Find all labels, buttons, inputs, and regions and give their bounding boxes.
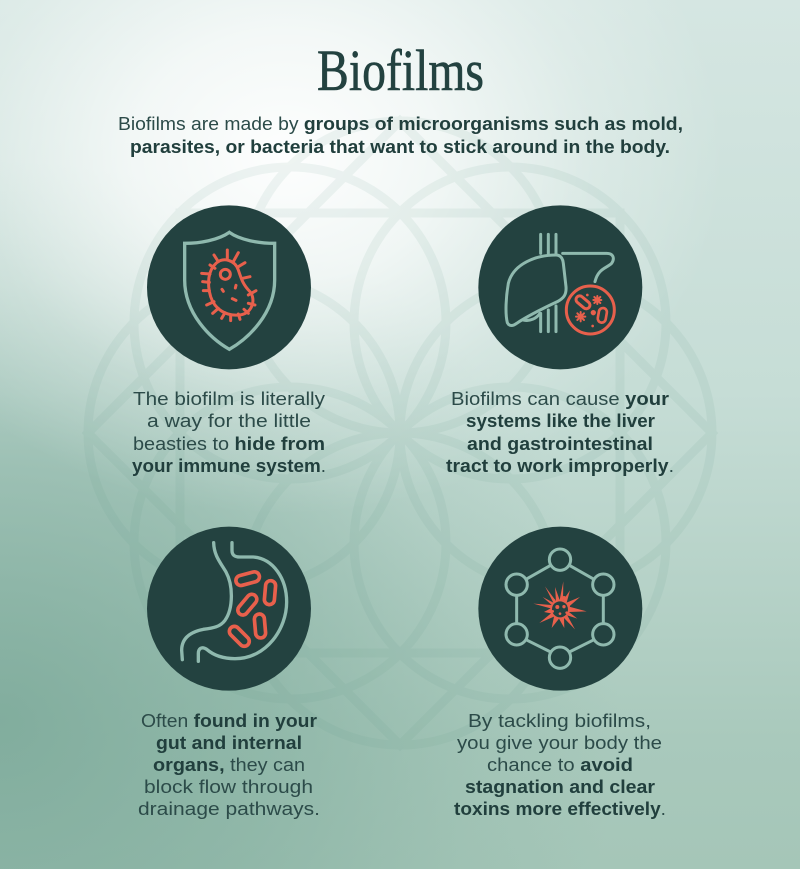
text block: Biofilms can cause your	[451, 388, 669, 409]
text block	[138, 710, 320, 819]
text block: systems like the liver	[466, 410, 655, 431]
text block: block flow through	[144, 776, 313, 797]
text block: drainage pathways.	[138, 798, 320, 819]
text block: you give your body the	[457, 732, 662, 753]
text block: toxins more effectively .	[454, 798, 666, 819]
icon: liver with microbes	[478, 205, 642, 369]
flower of life background pattern	[88, 121, 712, 745]
panel: stomach	[138, 527, 320, 819]
text block	[132, 388, 326, 476]
text block: The biofilm is literally	[133, 388, 326, 409]
text block: stagnation and clear	[465, 776, 655, 797]
intro text	[118, 113, 683, 157]
icon: shield with bacterium	[147, 205, 311, 369]
icon: molecule network with microbe	[478, 527, 642, 691]
text block: your immune system.	[132, 455, 326, 476]
icon: stomach with bacteria	[147, 527, 311, 691]
text block: a way for the little	[147, 410, 311, 431]
text block: beasties to hide from	[133, 433, 325, 454]
text block: Often found in your	[141, 710, 317, 731]
panel: liver	[446, 205, 674, 476]
panel: network	[454, 527, 666, 819]
text block: tract to work improperly .	[446, 455, 674, 476]
text block	[454, 710, 666, 819]
title: Biofilms	[317, 38, 484, 103]
text block: gut and internal	[156, 732, 302, 753]
text block: and gastrointestinal	[467, 433, 653, 454]
panel: shield	[132, 205, 326, 476]
intro text: parasites, or bacteria that want to stick around in the body.	[130, 136, 670, 157]
text block: organs, they can	[153, 754, 305, 775]
text block	[446, 388, 674, 476]
text block: chance to avoid	[487, 754, 633, 775]
intro text: Biofilms are made by groups of microorganisms such as mold,	[118, 113, 683, 134]
text block: By tackling biofilms,	[468, 710, 651, 731]
